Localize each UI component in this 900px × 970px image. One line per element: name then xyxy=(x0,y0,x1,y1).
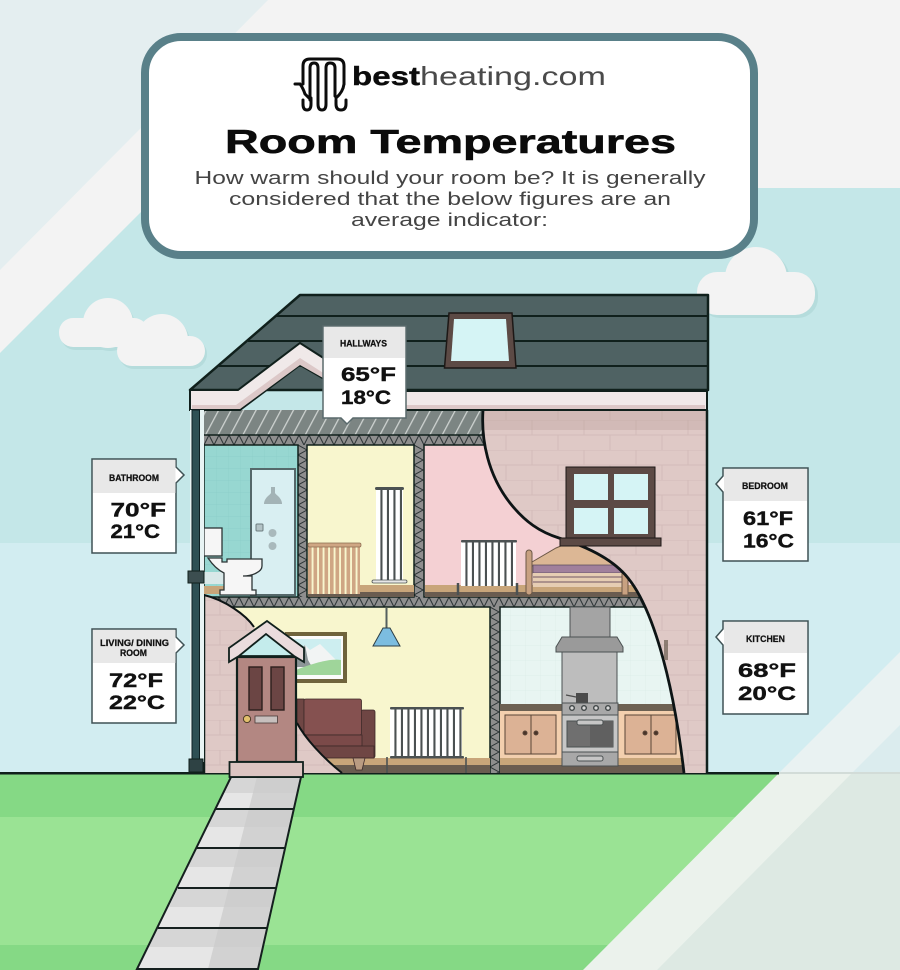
label: bedroom xyxy=(716,468,808,561)
label: kitchen: 68°F xyxy=(738,661,796,682)
staircase xyxy=(308,543,361,594)
label: kitchen: KITCHEN xyxy=(746,634,785,644)
label: bedroom: 61°F xyxy=(743,509,793,530)
gable hatch xyxy=(204,410,482,434)
intro text: How warm should your room be? It is generally xyxy=(194,168,706,188)
roof skylight xyxy=(444,313,516,368)
brick window xyxy=(560,467,661,546)
toilet xyxy=(204,528,262,595)
header panel xyxy=(145,37,754,255)
label: hallways: 18°C xyxy=(341,388,391,409)
fascia board xyxy=(190,343,707,410)
label: bedroom: 16°C xyxy=(743,532,794,552)
roof xyxy=(190,295,708,390)
pot xyxy=(566,693,588,703)
label: kitchen xyxy=(716,621,808,714)
shower xyxy=(251,469,295,595)
room: living and dining xyxy=(204,607,490,773)
cloud right xyxy=(697,247,818,318)
grass lawn xyxy=(0,772,900,970)
logo: radiator icon xyxy=(295,59,346,110)
cooker xyxy=(562,703,618,766)
label: bathroom: 21°C xyxy=(110,522,160,543)
logo: wordmark xyxy=(352,61,606,91)
label: bathroom xyxy=(92,459,184,553)
lamp xyxy=(373,608,400,646)
label: bathroom: 70°F xyxy=(110,500,166,522)
drain pipe xyxy=(188,410,204,772)
logo: wordmark: best xyxy=(352,61,420,91)
label: living and dining room: 22°C xyxy=(109,693,165,714)
door panel xyxy=(237,657,296,762)
radiator living room xyxy=(387,707,466,773)
clouds left xyxy=(59,298,207,369)
room: hallway xyxy=(307,445,414,597)
label: kitchen: 20°C xyxy=(738,684,796,705)
door step xyxy=(230,762,303,777)
label: living and dining room xyxy=(92,629,184,723)
radiator tall xyxy=(372,487,407,583)
sofa xyxy=(297,699,375,770)
intro text: average indicator: xyxy=(351,210,548,230)
label: hallways xyxy=(323,326,406,424)
intro text xyxy=(194,168,706,230)
room: bedroom xyxy=(424,445,664,597)
house xyxy=(188,295,708,777)
brick walls xyxy=(204,410,707,773)
front door xyxy=(229,621,304,777)
radiator bedroom xyxy=(458,540,517,595)
room: bathroom xyxy=(204,445,298,597)
logo: wordmark: heating.com xyxy=(420,61,606,91)
door canopy xyxy=(229,621,304,662)
cupboards left xyxy=(505,715,556,754)
bed xyxy=(526,543,628,595)
cupboards right xyxy=(625,715,676,754)
title: Room Temperatures xyxy=(225,123,676,160)
garden path xyxy=(137,777,301,969)
label: living and dining room: 72°F xyxy=(109,671,163,692)
label: living and dining room: ROOM xyxy=(120,648,147,658)
label: hallways: HALLWAYS xyxy=(340,338,387,348)
label: bathroom: BATHROOM xyxy=(109,473,159,483)
intro text: considered that the below figures are an xyxy=(229,189,671,209)
label: living and dining room: LIVING/ DINING xyxy=(100,638,169,648)
label: hallways: 65°F xyxy=(341,365,396,386)
cutaway interior xyxy=(204,410,683,773)
label: bedroom: BEDROOM xyxy=(742,481,788,491)
cutaway edge lines xyxy=(204,410,684,773)
floor trusses xyxy=(204,435,684,773)
cooker hood xyxy=(556,607,623,703)
room: kitchen xyxy=(500,607,690,773)
picture xyxy=(285,632,347,683)
